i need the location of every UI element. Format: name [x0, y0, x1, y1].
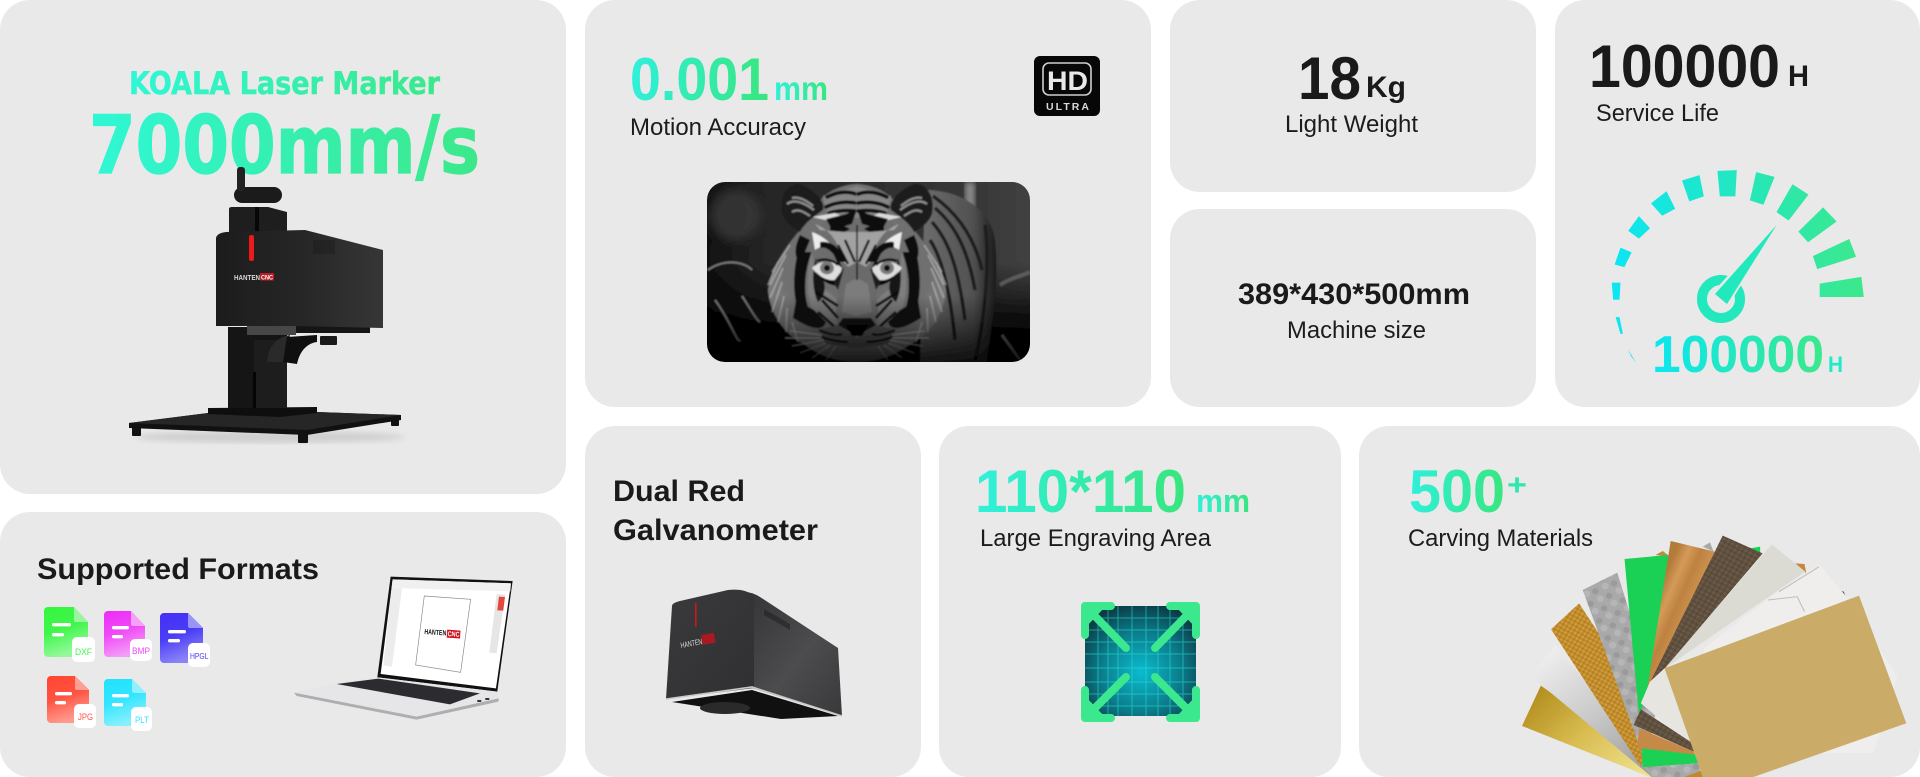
- panel: service life: [1555, 0, 1920, 407]
- panel: machine size: [1170, 209, 1536, 407]
- figure: 100000 H: H: [1788, 60, 1809, 93]
- icon: BMP file: BMP: [132, 646, 150, 656]
- figure: 389*430*500mm: 389*430*500mm: [1238, 278, 1470, 311]
- icon: laser marking machine: CNC: [261, 274, 273, 282]
- figure: 500+: +: [1507, 469, 1527, 502]
- label: Large Engraving Area: Large Engraving Area: [980, 525, 1212, 552]
- label: Carving Materials: Carving Materials: [1408, 525, 1593, 552]
- icon: BMP file: [104, 611, 152, 661]
- panel: carving materials: [1359, 426, 1920, 777]
- icon: HD Ultra badge: [1034, 56, 1100, 116]
- heading: Dual Red Galvanometer: Galvanometer: [613, 514, 818, 547]
- chart: speedometer gauge: 100000: [1652, 326, 1824, 384]
- icon: HD Ultra badge: HD: [1047, 66, 1088, 96]
- icon: laser marking machine: [129, 167, 405, 443]
- icon: laser marking machine: HANTEN: [234, 275, 260, 282]
- panel: dual red galvanometer: [585, 426, 921, 777]
- icon: JPG file: JPG: [78, 712, 93, 723]
- figure: 110*110 mm: mm: [1196, 483, 1250, 519]
- icon: PLT file: [104, 679, 152, 731]
- panel: supported formats: [0, 512, 566, 777]
- figure: 500+: 500: [1409, 458, 1505, 525]
- icon: JPG file: [47, 676, 96, 728]
- panel: KOALA laser marker speed: [0, 0, 566, 494]
- figure: 100000 H: 100000: [1589, 33, 1780, 100]
- figure: 18 Kg: [1298, 45, 1406, 112]
- panel: light weight: [1170, 0, 1536, 192]
- heading: Dual Red Galvanometer: [613, 475, 818, 547]
- figure: 18 Kg: Kg: [1366, 71, 1406, 104]
- label: Machine size: Machine size: [1287, 317, 1426, 344]
- icon: expanding work area: [1085, 606, 1196, 718]
- icon: HPGL file: HPGL: [190, 651, 209, 661]
- icon: galvanometer head: HANTEN: [680, 637, 703, 650]
- heading: 7000mm/s speed figure: 7000mm/s: [89, 99, 480, 192]
- image: fan of material sheets: [1522, 536, 1906, 777]
- heading: Dual Red Galvanometer: Dual Red: [613, 475, 745, 508]
- label: Light Weight: Light Weight: [1285, 111, 1418, 138]
- label: Service Life: Service Life: [1596, 100, 1719, 127]
- icon: galvanometer head: [666, 590, 842, 719]
- image: black and white tiger: [707, 182, 1030, 362]
- icon: HPGL file: [160, 613, 210, 667]
- icon: DXF file: [44, 607, 95, 662]
- panel: motion accuracy: [585, 0, 1151, 407]
- chart: speedometer gauge: H: [1828, 352, 1843, 377]
- panel: engraving area: [939, 426, 1341, 777]
- icon: laptop with design software: CNC: [447, 631, 460, 639]
- icon: DXF file: DXF: [75, 647, 92, 658]
- figure: 110*110 mm: 110*110: [975, 458, 1186, 525]
- label: Motion Accuracy: Motion Accuracy: [630, 114, 806, 141]
- figure: 0.001 mm: 0.001: [630, 46, 769, 113]
- icon: laptop with design software: HANTEN: [424, 627, 447, 638]
- icon: HD Ultra badge: ULTRA: [1046, 101, 1089, 113]
- icon: PLT file: PLT: [135, 715, 149, 726]
- figure: 18 Kg: 18: [1298, 45, 1361, 112]
- heading: KOALA Laser Marker: KOALA Laser Marker: [129, 66, 441, 102]
- icon: laptop with design software: [294, 577, 513, 720]
- chart: speedometer gauge: [1612, 170, 1864, 384]
- heading: Supported Formats: Supported Formats: [37, 553, 319, 586]
- figure: 0.001 mm: mm: [774, 70, 828, 107]
